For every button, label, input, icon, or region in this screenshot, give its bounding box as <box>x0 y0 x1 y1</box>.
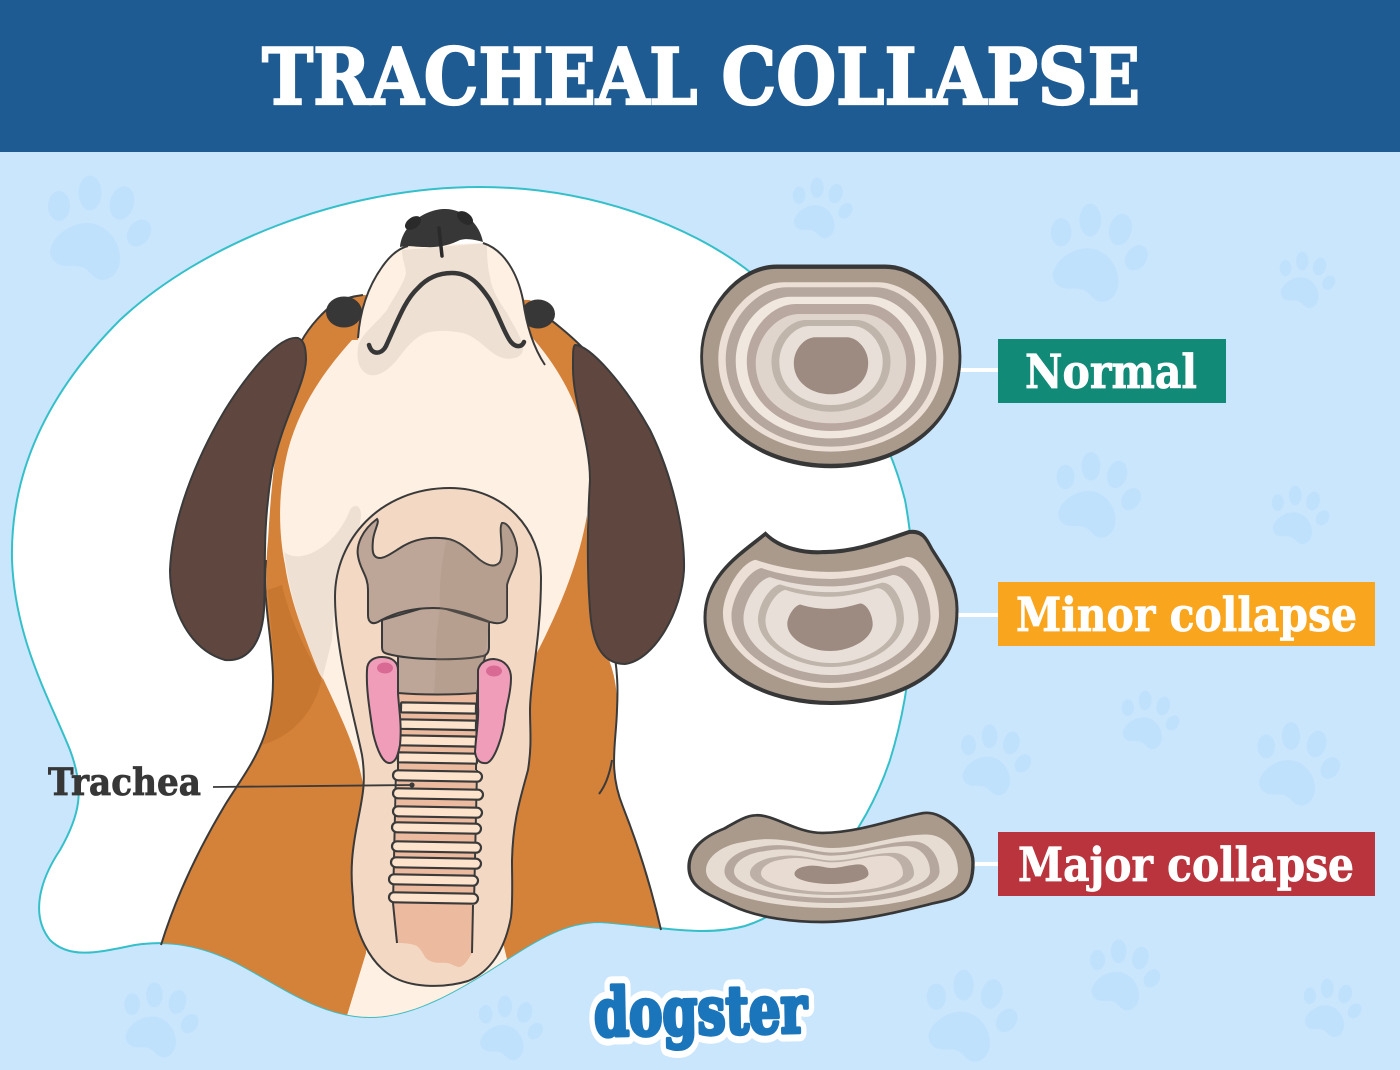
nose <box>400 209 483 247</box>
nostrils <box>402 208 476 233</box>
right ear <box>573 345 684 664</box>
label text: normal: Normal <box>1025 345 1197 400</box>
label box: normal <box>998 339 1226 403</box>
muzzle shading <box>358 243 523 375</box>
cricoid cartilage <box>382 605 489 659</box>
right thyroid gland <box>475 659 511 763</box>
cartilage shading <box>434 523 517 693</box>
dog body and neck <box>161 295 661 1030</box>
gland spots <box>377 662 502 676</box>
dogster logo: dogster <box>593 970 809 1052</box>
cross-section: minor collapse <box>705 532 957 703</box>
dog illustration <box>161 208 684 1030</box>
muzzle fill <box>358 243 545 375</box>
trachea tube side lines <box>393 693 477 953</box>
cross-section: normal <box>702 267 960 466</box>
thyroid cartilage <box>358 519 517 623</box>
philtrum <box>439 228 442 256</box>
left thyroid gland <box>367 657 401 763</box>
label text: major collapse: Major collapse <box>1018 838 1354 893</box>
throat region <box>335 488 541 986</box>
shoulder outline <box>301 295 582 347</box>
white blob background <box>12 187 913 1017</box>
header banner <box>0 0 1400 152</box>
connector lines <box>955 370 998 864</box>
tracheal rings <box>389 702 483 904</box>
dogster logo: dogster <box>593 970 809 1052</box>
neck outline left <box>161 560 273 945</box>
neck outline right <box>612 640 661 930</box>
label box: major collapse <box>998 832 1375 896</box>
left ear <box>170 338 306 660</box>
background paw prints <box>48 176 1364 1062</box>
label text: minor collapse: Minor collapse <box>1016 588 1357 643</box>
jowl patches <box>326 296 555 328</box>
trachea pointer line <box>213 782 415 788</box>
label: trachea: Trachea <box>48 760 201 804</box>
trachea tube <box>393 693 477 967</box>
mouth <box>369 273 524 353</box>
cross-section: major collapse <box>689 813 973 922</box>
title: TRACHEAL COLLAPSE <box>262 32 1140 123</box>
muzzle outline <box>358 243 545 365</box>
label box: minor collapse <box>998 582 1375 646</box>
side tick mark <box>599 760 612 794</box>
larynx lower section <box>398 655 485 694</box>
